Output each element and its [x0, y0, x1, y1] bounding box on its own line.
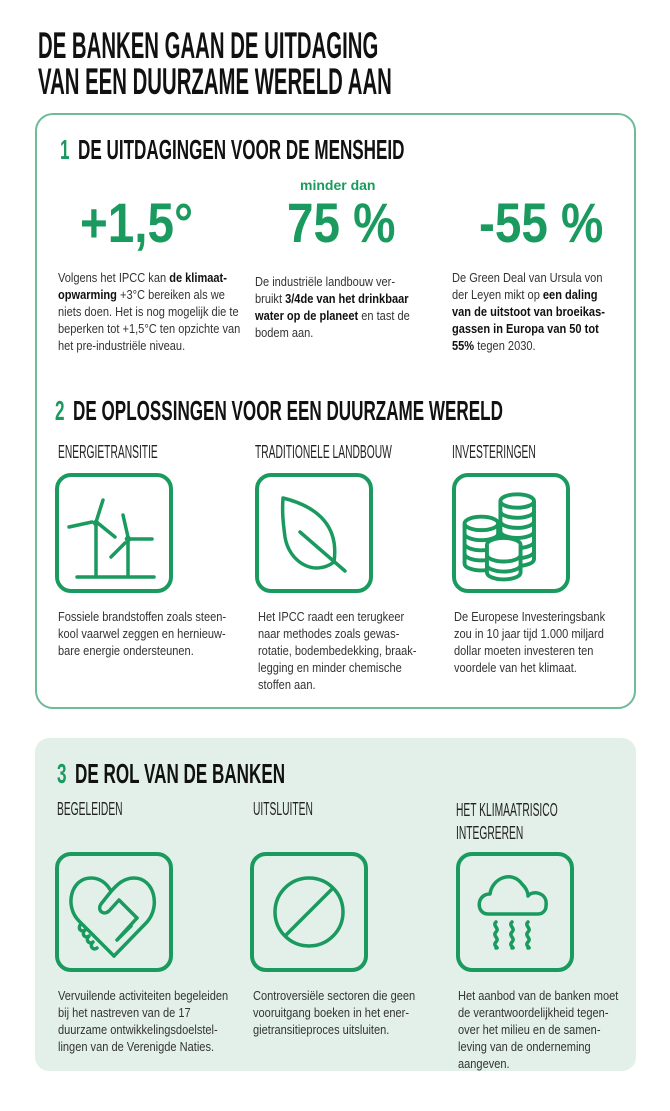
text: vervuilende activiteiten: bij het nastreven van de 17 — [58, 1005, 191, 1020]
subheading: klimaatrisico: HET KLIMAATRISICO — [456, 800, 558, 820]
text: landbouw: bodem aan. — [255, 325, 313, 340]
text: aanbod banken: Het aanbod van de banken moet — [458, 988, 618, 1003]
text: fossiele brandstoffen — [58, 609, 226, 658]
stat: 75%: 75 % — [287, 191, 395, 254]
icon: leaf — [255, 473, 373, 593]
text: controversiële sectoren — [253, 988, 415, 1037]
text: IPCC methodes: Het IPCC raadt een terugkeer — [258, 609, 404, 624]
subheading: investeringen: INVESTERINGEN — [452, 442, 536, 462]
label: minder dan: minder dan — [300, 177, 375, 193]
text: aanbod banken: over het milieu en de samen- — [458, 1022, 601, 1037]
icon: rain cloud — [456, 852, 574, 972]
heading 2: 2 DE OPLOSSINGEN VOOR EEN DUURZAME WERELD — [55, 395, 503, 426]
subheading: uitsluiten: UITSLUITEN — [253, 799, 313, 819]
stat: -55%: -55 % — [479, 191, 603, 254]
text: landbouw: bruikt 3/4de van het drinkbaar — [255, 291, 409, 306]
text: aanbod banken: aangeven. — [458, 1056, 510, 1071]
text: green deal — [452, 270, 605, 353]
text: IPCC methodes: stoffen aan. — [258, 677, 316, 692]
subheading: klimaatrisico: INTEGREREN — [456, 823, 523, 843]
text: controversiële sectoren: gietransitieproces uitsluiten. — [253, 1022, 389, 1037]
stat: +1,5: +1,5° — [80, 191, 193, 254]
text: aanbod banken — [458, 988, 618, 1071]
title — [38, 25, 392, 102]
icon: handshake heart — [55, 852, 173, 972]
text: vervuilende activiteiten — [58, 988, 228, 1054]
icon: prohibited — [250, 852, 368, 972]
text: vervuilende activiteiten: Vervuilende activiteiten begeleiden — [58, 988, 228, 1003]
text: green deal: der Leyen mikt op een daling — [452, 287, 598, 302]
text: IPCC methodes: rotatie, bodembedekking, braak- — [258, 643, 416, 658]
subheading: energietransitie: ENERGIETRANSITIE — [58, 442, 158, 462]
text: IPCC: het pre-industriële niveau. — [58, 338, 185, 353]
text: IPCC methodes — [258, 609, 416, 692]
text: landbouw — [255, 274, 410, 340]
text: IPCC methodes: naar methodes zoals gewas- — [258, 626, 399, 641]
subheading: traditionele landbouw: TRADITIONELE LANDBOUW — [255, 442, 392, 462]
text: fossiele brandstoffen: bare energie ondersteunen. — [58, 643, 194, 658]
text: green deal: van de uitstoot van broeikas- — [452, 304, 605, 319]
title: DE BANKEN GAAN DE UITDAGING — [38, 25, 378, 66]
heading 1: 1 DE UITDAGINGEN VOOR DE MENSHEID — [60, 134, 404, 165]
text: green deal: 55% tegen 2030. — [452, 338, 536, 353]
text: IPCC methodes: legging en minder chemische — [258, 660, 402, 675]
text: controversiële sectoren: vooruitgang boeken in het ener- — [253, 1005, 409, 1020]
text: IPCC: beperken tot +1,5°C ten opzichte van — [58, 321, 240, 336]
text: investeringsbank: voordele van het klimaat. — [454, 660, 577, 675]
text: investeringsbank: zou in 10 jaar tijd 1.000 miljard — [454, 626, 604, 641]
text: green deal: gassen in Europa van 50 tot — [452, 321, 599, 336]
text: investeringsbank: De Europese Investeringsbank — [454, 609, 605, 624]
text: aanbod banken: de verantwoordelijkheid tegen- — [458, 1005, 609, 1020]
panel: uitdagingen en oplossingen — [35, 113, 636, 709]
icon: coins — [452, 473, 570, 593]
text: investeringsbank — [454, 609, 606, 675]
heading 3: 3 DE ROL VAN DE BANKEN — [57, 758, 285, 789]
subheading: begeleiden: BEGELEIDEN — [57, 799, 123, 819]
text: aanbod banken: leving van de onderneming — [458, 1039, 591, 1054]
text: landbouw: water op de planeet en tast de — [255, 308, 410, 323]
text: fossiele brandstoffen: kool vaarwel zeggen en hernieuw- — [58, 626, 226, 641]
title: VAN EEN DUURZAME WERELD AAN — [38, 61, 392, 102]
text: IPCC — [58, 270, 240, 353]
text: investeringsbank: dollar moeten investeren ten — [454, 643, 593, 658]
icon: wind turbines — [55, 473, 173, 593]
text: fossiele brandstoffen: Fossiele brandstoffen zoals steen- — [58, 609, 226, 624]
text: IPCC: Volgens het IPCC kan de klimaat- — [58, 270, 227, 285]
subheading: klimaatrisico — [456, 800, 558, 843]
panel: rol van de banken — [35, 738, 636, 1071]
text: IPCC: opwarming +3°C bereiken als we — [58, 287, 225, 302]
text: vervuilende activiteiten: lingen van de Verenigde Naties. — [58, 1039, 214, 1054]
text: controversiële sectoren: Controversiële sectoren die geen — [253, 988, 415, 1003]
text: vervuilende activiteiten: duurzame ontwikkelingsdoelstel- — [58, 1022, 218, 1037]
text: IPCC: niets doen. Het is nog mogelijk die te — [58, 304, 239, 319]
text: green deal: De Green Deal van Ursula von — [452, 270, 602, 285]
text: landbouw: De industriële landbouw ver- — [255, 274, 395, 289]
